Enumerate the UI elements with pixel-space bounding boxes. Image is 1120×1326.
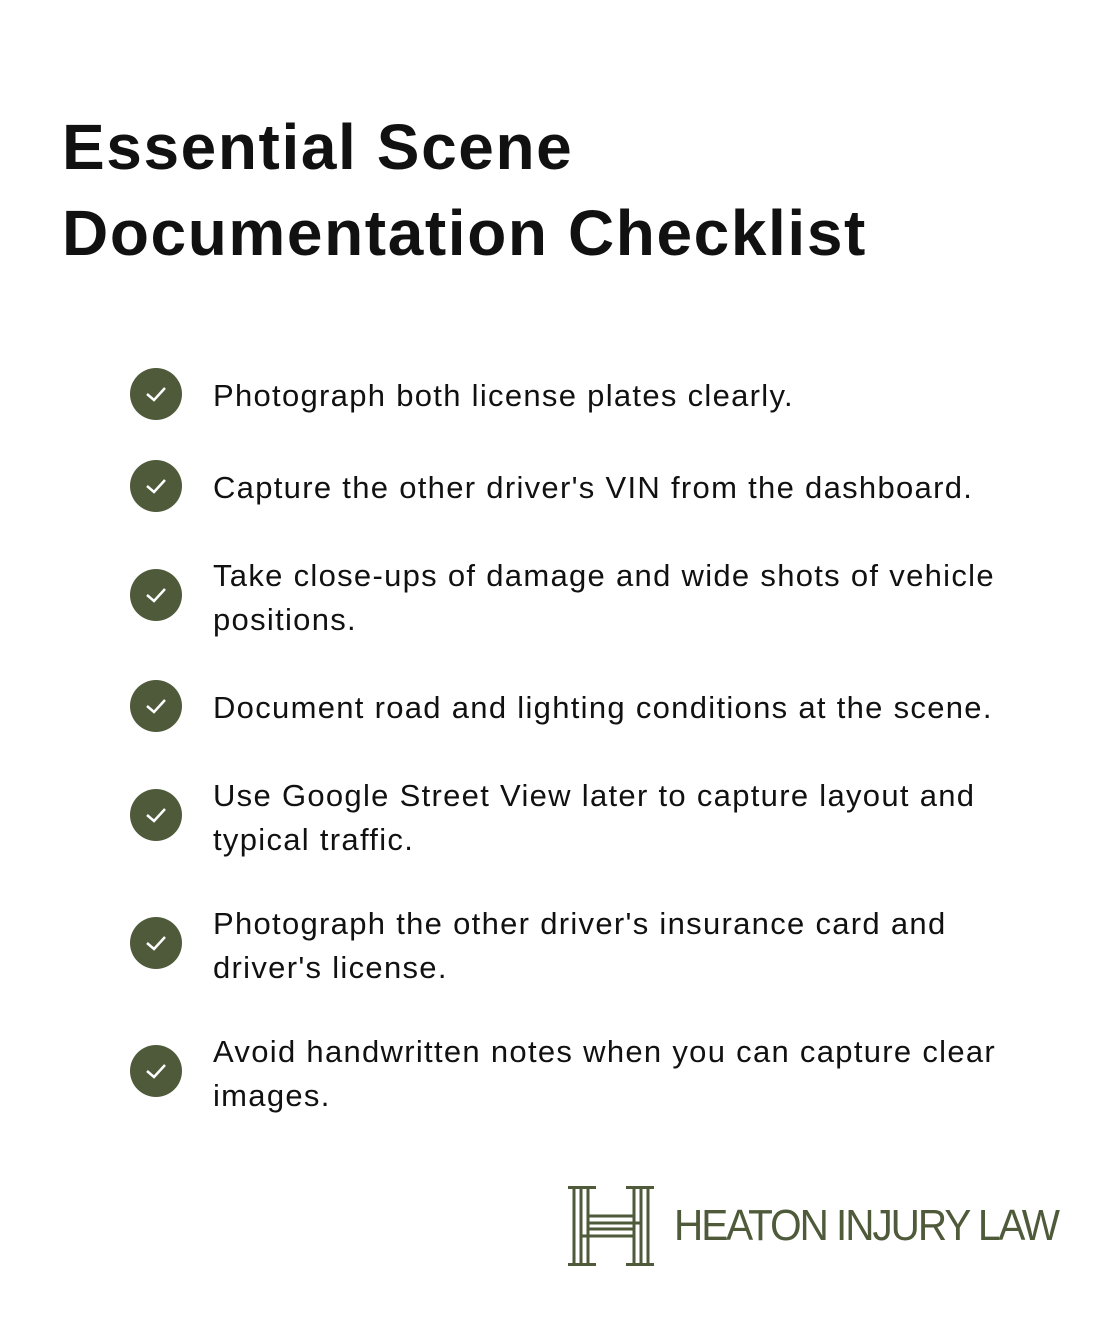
item 4 [130, 680, 993, 732]
item 7: Avoid handwritten notes when you can capture clear [213, 1034, 996, 1069]
item 3: positions. [213, 602, 357, 637]
item 3: Take close-ups of damage and wide shots of vehicle [213, 558, 995, 593]
item 7 [130, 1034, 996, 1113]
item 5 [130, 778, 975, 857]
title [62, 111, 867, 269]
item 6: Photograph the other driver's insurance card and [213, 906, 947, 941]
item 5: typical traffic. [213, 822, 414, 857]
logo [568, 1186, 1060, 1266]
title: Documentation Checklist [62, 197, 867, 269]
brand name: HEATON INJURY LAW [674, 1201, 1058, 1250]
item 1: Photograph both license plates clearly. [213, 378, 794, 413]
item 2: Capture the other driver's VIN from the dashboard. [213, 470, 973, 505]
item 3 [130, 558, 995, 637]
item 6 [130, 906, 947, 985]
item 5: Use Google Street View later to capture layout and [213, 778, 975, 813]
item 1 [130, 368, 794, 420]
item 2 [130, 460, 973, 512]
icon: H monogram [568, 1186, 654, 1266]
item 6: driver's license. [213, 950, 448, 985]
item 7: images. [213, 1078, 331, 1113]
item 4: Document road and lighting conditions at the scene. [213, 690, 993, 725]
title: Essential Scene [62, 111, 573, 183]
